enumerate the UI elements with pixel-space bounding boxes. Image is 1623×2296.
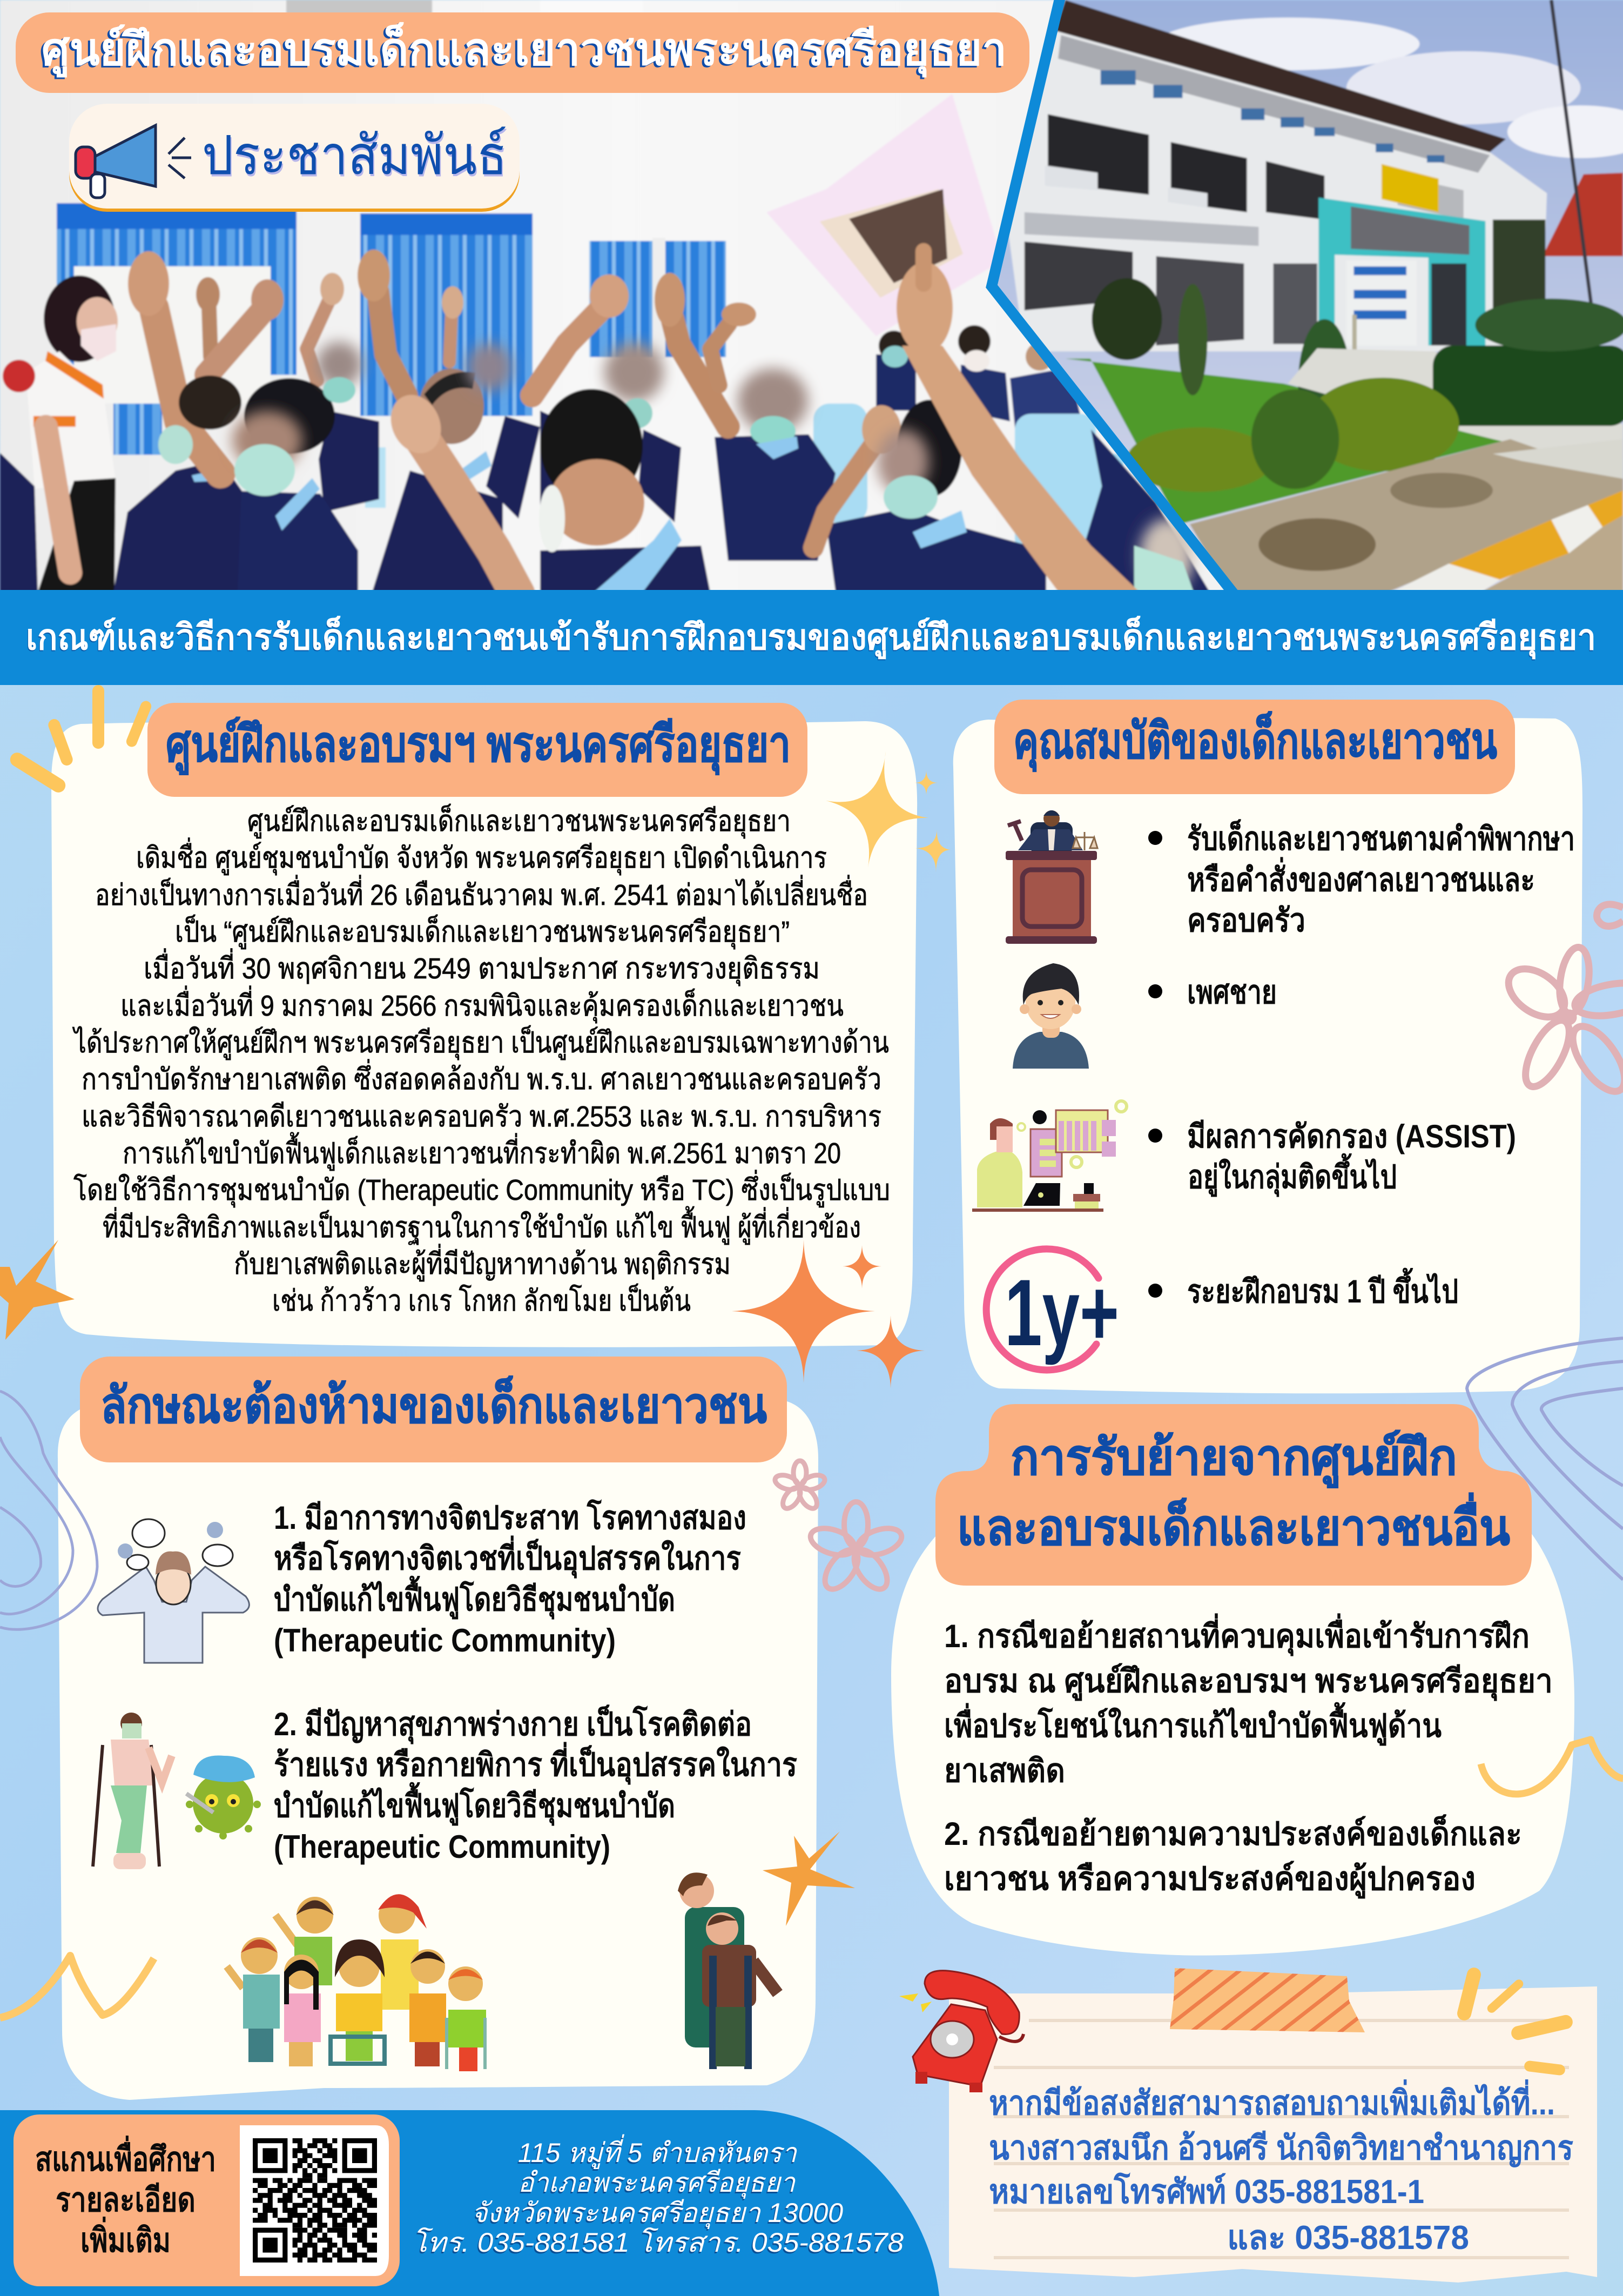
icon: one year plus: 1y+	[1005, 1260, 1119, 1366]
large foreground arm	[1069, 429, 1210, 592]
icon: orange star	[763, 1831, 855, 1926]
pupil bodies left	[0, 453, 38, 592]
address: จังหวัดพระนครศรีอยุธยา 13000	[472, 2198, 843, 2230]
text block: การบำบัดรักษายาเสพติด ซึ่งสอดคล้องกับ พ.ร.บ. ศาลเยาวชนและครอบครัว	[82, 1059, 881, 1096]
decoration: yellow squiggle	[0, 1956, 154, 2018]
heading: การรับย้ายจากศูนย์ฝึก	[1011, 1429, 1457, 1488]
bullet and text: court order: ครอบครัว	[1187, 902, 1305, 938]
icon: yellow sparkles	[826, 751, 951, 872]
text block: เยาวชน หรือความประสงค์ของผู้ปกครอง	[944, 1861, 1476, 1899]
text block: 2. กรณีขอย้ายตามความประสงค์ของเด็กและ	[944, 1814, 1522, 1852]
text block: ที่มีประสิทธิภาพและเป็นมาตรฐานในการใช้บำบัด แก้ไข ฟื้นฟู ผู้ที่เกี่ยวข้อง	[103, 1206, 861, 1245]
text block: อย่างเป็นทางการเมื่อวันที่ 26 เดือนธันวาคม พ.ศ. 2541 ต่อมาได้เปลี่ยนชื่อ	[95, 875, 868, 911]
heading	[80, 1357, 787, 1462]
contact text: และ 035-881578	[1227, 2219, 1469, 2257]
qr card	[14, 2114, 400, 2286]
text block: เมื่อวันที่ 30 พฤศจิกายน 2549 ตามประกาศ กระทรวงยุติธรรม	[144, 948, 820, 986]
text block: อบรม ณ ศูนย์ฝึกและอบรมฯ พระนครศรีอยุธยา	[944, 1663, 1553, 1701]
panel: transfer	[891, 1404, 1574, 1956]
qr card: เพิ่มเติม	[80, 2217, 171, 2259]
heading: ศูนย์ฝึกและอบรมฯ พระนครศรีอยุธยา	[166, 716, 791, 775]
icon: small pink flower	[773, 1461, 826, 1512]
centre and right pupils	[638, 429, 681, 522]
text: item one: (Therapeutic Community)	[274, 1622, 616, 1659]
heading	[147, 703, 807, 797]
background pupils	[876, 354, 916, 411]
address: 115 หมู่ที่ 5 ตำบลหันตรา	[518, 2134, 798, 2170]
text: item two: ร้ายแรง หรือกายพิการ ที่เป็นอุปสรรคในการ	[274, 1742, 797, 1785]
photo: classroom students raising hands	[0, 0, 1242, 594]
icon: pink flower	[807, 1502, 905, 1595]
text block: โดยใช้วิธีการชุมชนบำบัด (Therapeutic Community หรือ TC) ซึ่งเป็นรูปแบบ	[73, 1170, 890, 1208]
heading pill: centre name	[16, 12, 1029, 93]
yellow dashes	[1456, 1966, 1574, 2076]
icon: carer helping youth walk	[678, 1872, 778, 2069]
qr card: รายละเอียด	[56, 2181, 196, 2219]
icon: boy	[1013, 963, 1089, 1069]
icon: stressed man	[98, 1519, 249, 1663]
bullet and text: screening: มีผลการคัดกรอง (ASSIST)	[1187, 1118, 1516, 1154]
text block	[72, 804, 890, 1317]
text: item one: บำบัดแก้ไขฟื้นฟูโดยวิธีชุมชนบำบัด	[274, 1575, 675, 1620]
icon: man on crutches	[93, 1713, 172, 1869]
text block: การแก้ไขบำบัดฟื้นฟูเด็กและเยาวชนที่กระทำผิด พ.ศ.2561 มาตรา 20	[123, 1132, 841, 1171]
address: โทร. 035-881581 โทรสาร. 035-881578	[412, 2227, 904, 2258]
panel: contraindications	[0, 1357, 855, 2100]
text: item two: 2. มีปัญหาสุขภาพร่างกาย เป็นโรคติดต่อ	[274, 1704, 752, 1744]
text block: ยาเสพติด	[944, 1753, 1065, 1789]
icon: orange sparkles	[732, 1240, 925, 1388]
heading	[994, 700, 1515, 794]
decoration: outline flowers right	[1500, 904, 1623, 1100]
heading: ลักษณะต้องห้ามของเด็กและเยาวชน	[100, 1375, 767, 1433]
bullet and text: male: เพศชาย	[1187, 974, 1277, 1010]
bullet and text: duration: ระยะฝึกอบรม 1 ปี ขึ้นไป	[1187, 1267, 1458, 1310]
badge: public relations	[69, 104, 520, 212]
panel: eligibility	[953, 700, 1582, 1393]
divider: blue diagonal band between photos	[992, 0, 1234, 594]
icon: office worker screening	[972, 1101, 1127, 1212]
heading	[935, 1404, 1532, 1586]
address	[412, 2134, 904, 2258]
icon: judge at bench	[1006, 810, 1097, 944]
text block: และเมื่อวันที่ 9 มกราคม 2566 กรมพินิจและคุ้มครองเด็กและเยาวชน	[120, 985, 844, 1024]
qr code	[253, 2141, 377, 2260]
decoration: contour lines left	[0, 1391, 97, 1629]
badge: public relations: ประชาสัมพันธ์	[202, 125, 507, 186]
panel: contact note	[949, 1966, 1597, 2282]
text block: กับยาเสพติดและผู้ที่มีปัญหาทางด้าน พฤติกรรม	[234, 1244, 731, 1281]
icon: group of diverse youth	[227, 1894, 486, 2071]
bullet and text: court order: หรือคำสั่งของศาลเยาวชนและ	[1187, 857, 1535, 898]
bullet and text: screening: อยู่ในกลุ่มติดขึ้นไป	[1188, 1153, 1397, 1197]
icon: orange splat star	[0, 1240, 75, 1340]
contact text	[989, 2079, 1573, 2257]
washi tape	[1170, 1968, 1365, 2032]
icon: megaphone	[76, 125, 191, 198]
decoration: contour lines lower right	[1467, 1338, 1623, 1580]
icon: yellow rays	[8, 685, 153, 795]
text block: ได้ประกาศให้ศูนย์ฝึกฯ พระนครศรีอยุธยา เป็นศูนย์ฝึกและอบรมเฉพาะทางด้าน	[72, 1025, 889, 1060]
panel: centre history	[0, 685, 951, 1388]
bullet and text: screening	[1148, 1118, 1516, 1197]
text: item one: 1. มีอาการทางจิตประสาท โรคทางสมอง	[274, 1499, 746, 1536]
text block: 1. กรณีขอย้ายสถานที่ควบคุมเพื่อเข้ารับการฝึก	[944, 1613, 1530, 1656]
bullet and text: duration	[1148, 1267, 1458, 1310]
banner: criteria title	[0, 590, 1623, 685]
paper held up	[766, 94, 1004, 336]
teacher	[44, 276, 115, 362]
decoration: yellow ribbon squiggle	[1481, 1740, 1623, 1794]
text: item one	[274, 1499, 746, 1659]
contact text: หมายเลขโทรศัพท์ 035-881581-1	[989, 2172, 1424, 2211]
bullet and text: male	[1148, 974, 1277, 1010]
icon: sick virus	[186, 1755, 261, 1840]
contact text: หากมีข้อสงสัยสามารถสอบถามเพิ่มเติมได้ที่...	[989, 2079, 1555, 2122]
footer: blue address block	[0, 2110, 939, 2296]
text: item two: (Therapeutic Community)	[274, 1829, 610, 1865]
text block: เดิมชื่อ ศูนย์ชุมชนบำบัด จังหวัด พระนครศรีอยุธยา เปิดดำเนินการ	[136, 837, 827, 876]
text: item one: หรือโรคทางจิตเวชที่เป็นอุปสรรคในการ	[274, 1535, 741, 1579]
text: item two: บำบัดแก้ไขฟื้นฟูโดยวิธีชุมชนบำบัด	[274, 1782, 675, 1826]
text block	[944, 1613, 1553, 1899]
text block: เป็น “ศูนย์ฝึกและอบรมเด็กและเยาวชนพระนครศรีอยุธยา”	[175, 915, 790, 950]
qr card: สแกนเพื่อศึกษา	[35, 2136, 216, 2178]
text block: ศูนย์ฝึกและอบรมเด็กและเยาวชนพระนครศรีอยุธยา	[247, 804, 791, 839]
bullet and text: court order	[1148, 819, 1575, 938]
photo: training centre building	[966, 0, 1623, 593]
text block: เพื่อประโยชน์ในการแก้ไขบำบัดฟื้นฟูด้าน	[944, 1702, 1442, 1746]
heading: และอบรมเด็กและเยาวชนอื่น	[957, 1492, 1510, 1555]
heading pill: centre name: ศูนย์ฝึกและอบรมเด็กและเยาวชนพระนครศรีอยุธยา	[42, 22, 1007, 78]
left arms	[209, 308, 211, 357]
icon: one year plus	[986, 1249, 1119, 1370]
text block: เช่น ก้าวร้าว เกเร โกหก ลักขโมย เป็นต้น	[272, 1284, 691, 1317]
address: อำเภอพระนครศรีอยุธยา	[518, 2167, 796, 2199]
left heads	[179, 375, 241, 429]
chairs	[813, 404, 867, 522]
text block: และวิธีพิจารณาคดีเยาวชนและครอบครัว พ.ศ.2553 และ พ.ร.บ. การบริหาร	[82, 1100, 881, 1133]
icon: red telephone	[899, 1971, 1023, 2092]
text: item two	[274, 1704, 797, 1865]
